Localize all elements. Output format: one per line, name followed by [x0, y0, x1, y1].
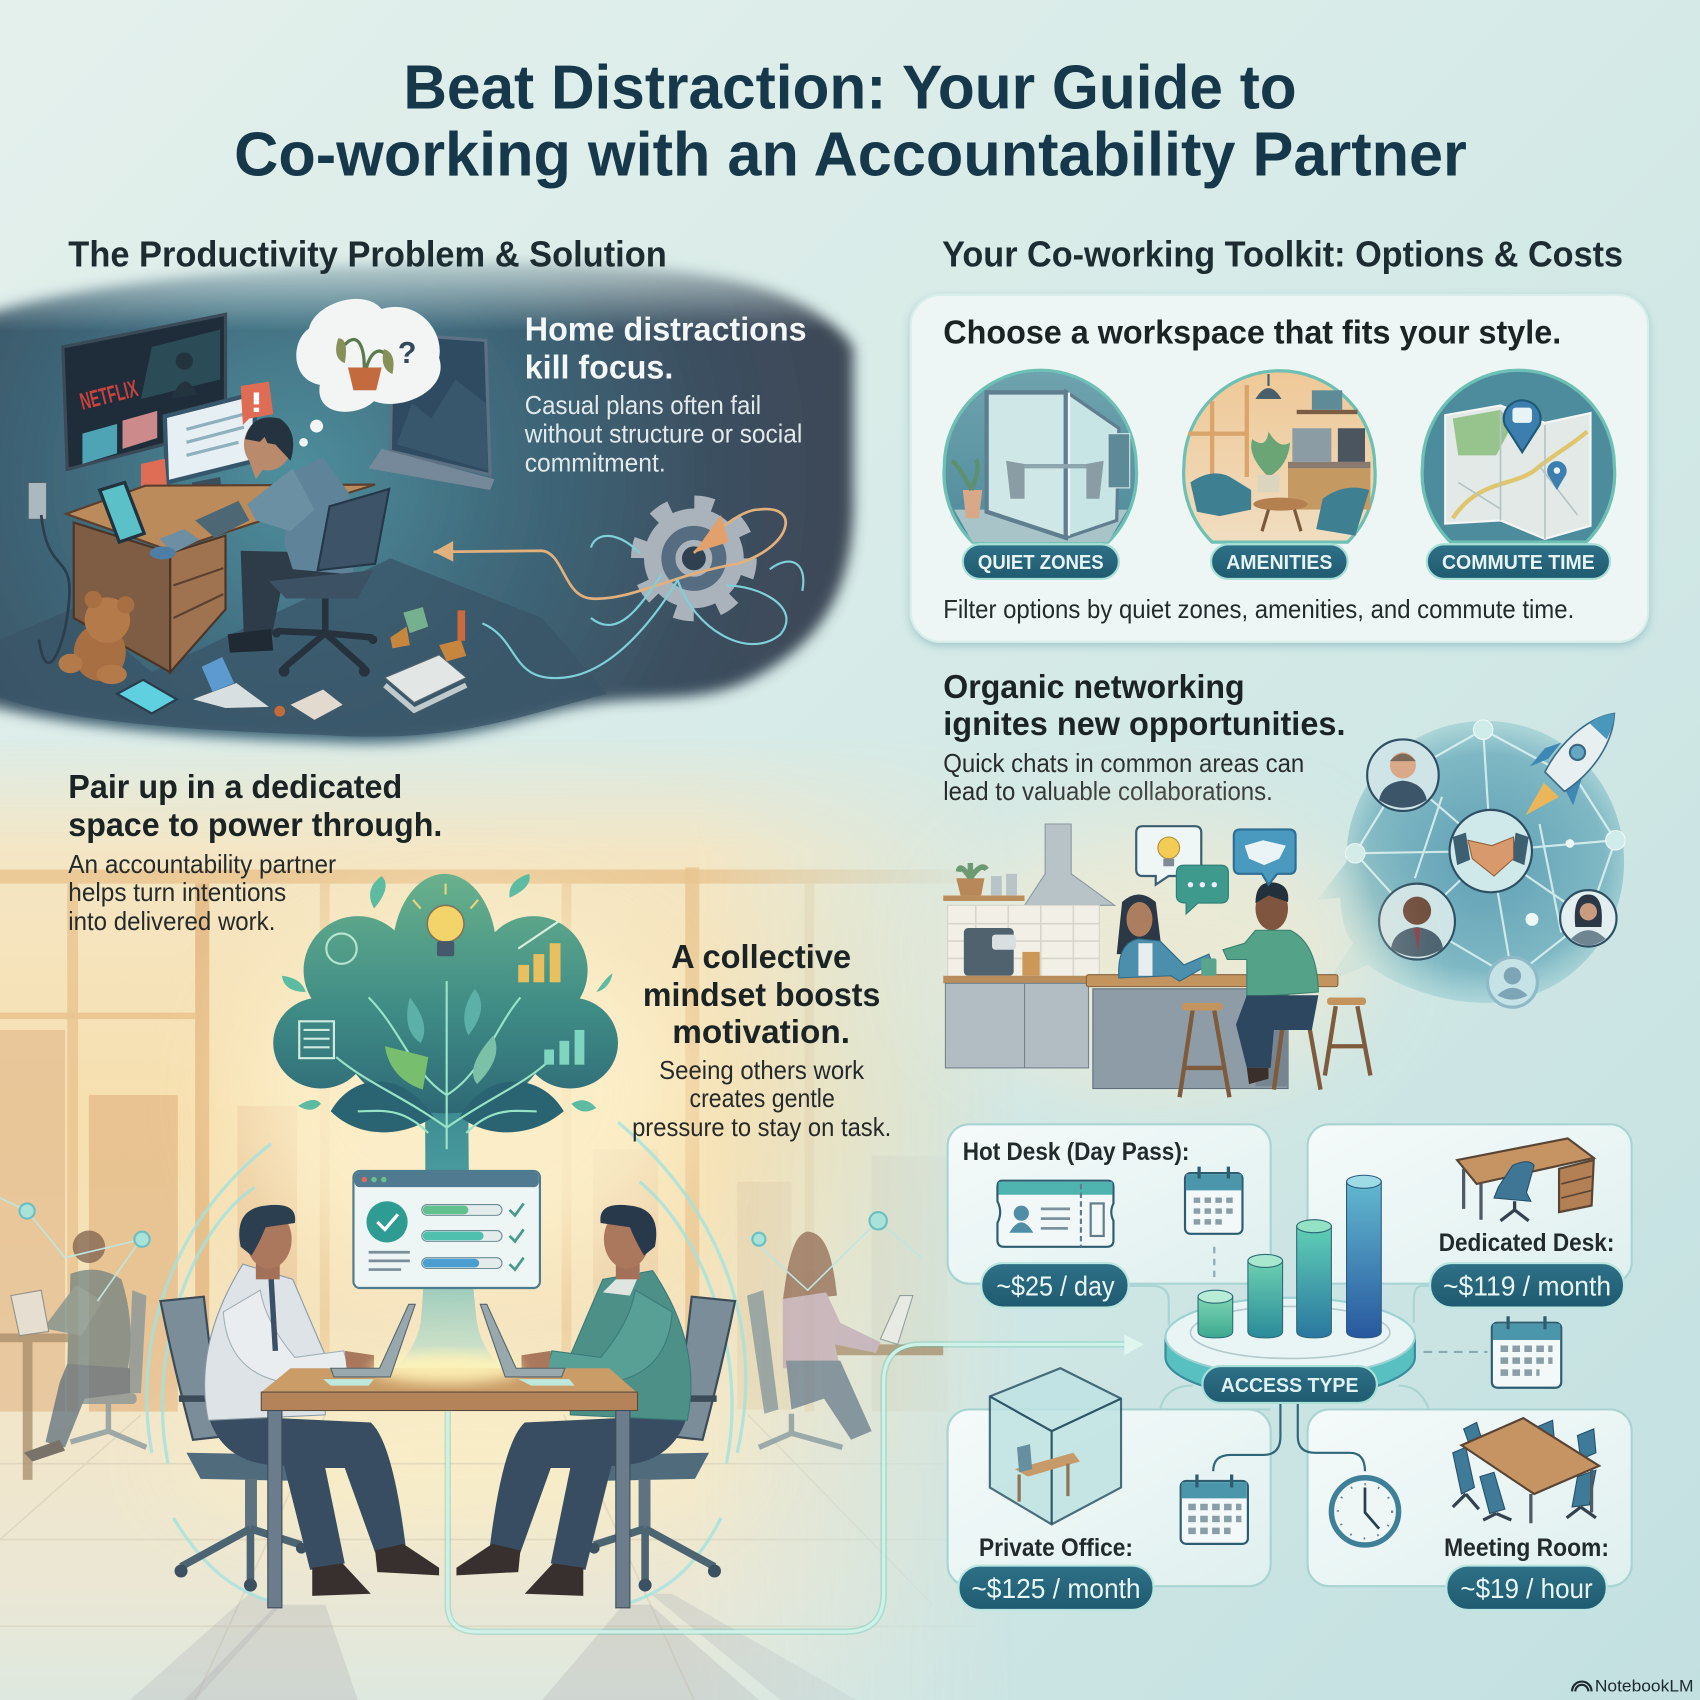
collective mindset text: motivation.	[672, 1014, 850, 1051]
access type label: ACCESS TYPE	[1221, 1374, 1358, 1397]
kitchen background	[943, 824, 1115, 1068]
icon: calendar day pass	[1185, 1167, 1242, 1234]
speech bubble: idea	[1136, 826, 1201, 885]
right background worker	[747, 1232, 943, 1447]
panel: choose a workspace	[911, 295, 1648, 642]
networking text: lead to valuable collaborations.	[943, 776, 1273, 806]
card: meeting room	[1308, 1409, 1632, 1586]
dedicated desk label: Dedicated Desk:	[1439, 1229, 1614, 1257]
price: meeting room	[1446, 1566, 1607, 1610]
title: Co-working with an Accountability Partner	[234, 121, 1467, 190]
access type label	[1202, 1366, 1377, 1403]
icon: calendar private office	[1181, 1474, 1248, 1544]
icon: person node top-left	[1367, 739, 1439, 811]
icon: generic user node	[1488, 957, 1537, 1007]
home distractions text: commitment.	[525, 448, 666, 478]
icon: amenities lounge	[1184, 371, 1375, 542]
pair up text: space to power through.	[68, 807, 442, 844]
tv monitor with streaming app	[63, 314, 226, 469]
pair up text: into delivered work.	[68, 906, 275, 936]
stools	[1180, 997, 1370, 1097]
pair up text	[68, 769, 442, 936]
section heading: productivity problem: The Productivity Problem & Solution	[68, 235, 667, 275]
desktop monitor	[165, 394, 255, 513]
kitchen island	[1086, 975, 1338, 1089]
icon: handshake node	[1450, 810, 1532, 892]
bar four	[1347, 1175, 1381, 1338]
icon: calendar dedicated desk	[1492, 1316, 1561, 1388]
floor	[0, 558, 607, 737]
title: Beat Distraction: Your Guide to	[403, 53, 1297, 122]
teddy bear	[59, 591, 134, 684]
panel: productivity problem illustration	[0, 259, 853, 743]
man talking	[1223, 882, 1318, 1084]
collective mindset text: mindset boosts	[643, 977, 880, 1014]
network nodes	[0, 1198, 922, 1301]
price: private office	[958, 1566, 1154, 1610]
card: dedicated desk	[1308, 1124, 1632, 1284]
desk	[66, 485, 375, 672]
glowing arcs around partners	[147, 1122, 746, 1605]
card: private office	[948, 1409, 1271, 1586]
home distractions text	[524, 311, 807, 478]
home distractions text: Casual plans often fail	[525, 390, 761, 420]
pair up text: An accountability partner	[68, 849, 336, 879]
price: dedicated desk: ~$119 / month	[1443, 1270, 1611, 1302]
icon: commute map	[1422, 370, 1615, 542]
icon: person node right	[1560, 890, 1617, 946]
left partner	[205, 1205, 439, 1596]
home distractions text: without structure or social	[524, 418, 802, 448]
collective mindset text: creates gentle	[690, 1083, 835, 1113]
icon: meeting room table	[1453, 1418, 1599, 1523]
workspace heading: Choose a workspace that fits your style.	[943, 315, 1561, 352]
clutter on floor	[117, 607, 466, 720]
brand mark: NotebookLM	[1595, 1677, 1693, 1695]
price: dedicated desk	[1430, 1263, 1624, 1308]
collective mindset text: Seeing others work	[659, 1055, 865, 1085]
stressed person at desk	[228, 417, 353, 653]
bar three	[1297, 1220, 1331, 1338]
networking text: Organic networking	[943, 669, 1245, 706]
pair up text: Pair up in a dedicated	[68, 769, 402, 806]
icon: clock	[1331, 1478, 1399, 1545]
woman talking	[1117, 894, 1212, 981]
right partner	[456, 1205, 691, 1596]
tv monitor with streaming app: NETFLIX	[77, 375, 141, 416]
thought bubble with wilting plant	[296, 299, 441, 447]
speech bubble: handshake	[1234, 829, 1296, 885]
commute time label: COMMUTE TIME	[1442, 551, 1595, 574]
alert icons	[141, 382, 273, 497]
amenities label: AMENITIES	[1226, 551, 1332, 574]
card: hot desk	[948, 1124, 1271, 1284]
trunk of idea tree	[386, 1084, 512, 1375]
panel: network globe	[1317, 713, 1625, 1007]
commute time label	[1427, 544, 1610, 579]
filter caption: Filter options by quiet zones, amenities, and commute time.	[943, 594, 1574, 624]
speech bubble: chat	[1176, 865, 1228, 914]
idea tree crown	[273, 874, 618, 1149]
collective mindset text	[632, 939, 891, 1142]
thought bubble with wilting plant: ?	[398, 337, 416, 370]
hot desk label: Hot Desk (Day Pass):	[963, 1138, 1189, 1166]
icon: person node bottom-left	[1379, 884, 1455, 960]
left background worker	[0, 1231, 146, 1480]
pair up text: helps turn intentions	[68, 877, 286, 907]
networking text: ignites new opportunities.	[943, 706, 1345, 743]
card connectors	[1129, 1286, 1430, 1409]
private office label: Private Office:	[979, 1534, 1133, 1562]
broken gear with tangled lines	[434, 504, 803, 678]
right partner chair	[587, 1297, 735, 1592]
amenities label	[1211, 544, 1348, 579]
arrow: connecting scene to pricing	[448, 1335, 1144, 1632]
price: hot desk	[981, 1263, 1129, 1308]
phone and desk items	[100, 482, 249, 559]
bar one	[1198, 1290, 1233, 1338]
title	[234, 53, 1467, 190]
task screen with checks	[353, 1171, 540, 1288]
home distractions text: Home distractions	[525, 311, 807, 348]
left partner chair	[160, 1297, 309, 1592]
warm office backdrop	[0, 737, 1019, 1700]
window with night view	[369, 334, 494, 490]
networking text: Quick chats in common areas can	[943, 748, 1304, 778]
section heading: toolkit: Your Co-working Toolkit: Options & Costs	[942, 235, 1623, 275]
meeting room label: Meeting Room:	[1444, 1534, 1609, 1562]
quiet zones label	[963, 544, 1119, 579]
network nodes	[1345, 720, 1625, 926]
wall outlet and cable	[28, 482, 70, 663]
icon: day pass ticket	[997, 1181, 1113, 1247]
panel: accountability partners scene	[0, 769, 943, 1608]
icon: dedicated desk	[1457, 1138, 1594, 1221]
dark blob background	[0, 259, 853, 743]
icon: glass private office	[990, 1368, 1121, 1524]
table with laptops	[261, 1304, 638, 1608]
home distractions text: kill focus.	[525, 349, 673, 386]
price: meeting room: ~$19 / hour	[1460, 1572, 1593, 1604]
collective mindset text: pressure to stay on task.	[632, 1112, 891, 1142]
icon: quiet zone booth	[944, 370, 1137, 542]
coffee mug	[1201, 958, 1216, 976]
access type connectors	[1213, 1402, 1365, 1471]
price: hot desk: ~$25 / day	[996, 1270, 1115, 1302]
icon: rocket	[1525, 713, 1614, 815]
bar two	[1248, 1254, 1283, 1338]
platform with bars	[1165, 1175, 1415, 1399]
panel: pricing cards	[948, 1124, 1632, 1610]
quiet zones label: QUIET ZONES	[978, 551, 1104, 574]
price: private office: ~$125 / month	[971, 1572, 1141, 1604]
networking text	[943, 669, 1345, 806]
collective mindset text: A collective	[671, 939, 851, 976]
chair	[269, 489, 389, 677]
panel: kitchen conversation	[943, 824, 1370, 1097]
